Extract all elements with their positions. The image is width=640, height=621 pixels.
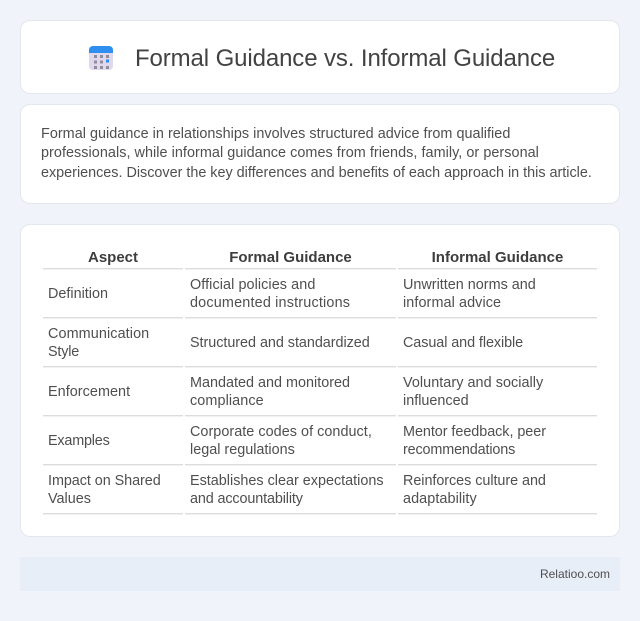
row: Examples: Mentor feedback, peer	[403, 424, 546, 440]
row: Enforcement: compliance	[190, 393, 264, 409]
row: Enforcement: Enforcement	[48, 384, 130, 400]
row: Enforcement: influenced	[403, 393, 469, 409]
row: Enforcement	[48, 375, 544, 409]
row: Examples: Corporate codes of conduct,	[190, 424, 372, 440]
row: Impact on Shared Values: and accountability	[190, 491, 303, 507]
row: Communication Style: Structured and standardized	[190, 335, 370, 351]
row: Communication Style: Communication	[48, 326, 149, 342]
row: Communication Style: Casual and flexible	[403, 335, 523, 351]
row: Examples: Examples	[48, 433, 110, 449]
table header: Formal Guidance: Formal Guidance	[229, 249, 352, 266]
table header: Informal Guidance: Informal Guidance	[432, 249, 563, 266]
row: Enforcement: Voluntary and socially	[403, 375, 543, 391]
row: Impact on Shared Values: adaptability	[403, 491, 477, 507]
row: Examples: recommendations	[403, 442, 515, 458]
row: Examples	[48, 424, 546, 458]
panel: header	[20, 20, 620, 94]
table header: Aspect: Aspect	[88, 249, 138, 266]
row: Definition: Official policies and	[190, 277, 315, 293]
row: Communication Style: Style	[48, 344, 79, 360]
row: Definition	[48, 277, 536, 311]
row: Definition: Definition	[48, 286, 108, 302]
row: Communication Style	[48, 326, 523, 360]
row: Impact on Shared Values: Establishes clear expectations	[190, 473, 384, 489]
text: intro line 1: Formal guidance in relationships involves structured advice from qualified	[41, 126, 510, 142]
row: Definition: documented instructions	[190, 295, 350, 311]
text: footer credit: Relatioo.com	[540, 567, 610, 581]
row: Impact on Shared Values	[48, 473, 546, 507]
row: Enforcement: Mandated and monitored	[190, 375, 350, 391]
panel: introduction	[20, 104, 620, 204]
row: Impact on Shared Values: Impact on Shared	[48, 473, 161, 489]
row: Examples: legal regulations	[190, 442, 295, 458]
panel: comparison table	[20, 224, 620, 537]
row: Definition: Unwritten norms and	[403, 277, 536, 293]
row: Impact on Shared Values: Values	[48, 491, 91, 507]
row: Impact on Shared Values: Reinforces culture and	[403, 473, 546, 489]
text: intro line 2: professionals, while informal guidance comes from friends, family, or personal	[41, 145, 539, 161]
footer	[20, 557, 620, 591]
icon: calendar	[89, 46, 113, 70]
row: Definition: informal advice	[403, 295, 501, 311]
text: intro line 3: experiences. Discover the key differences and benefits of each approach in this article.	[41, 165, 592, 181]
title: Formal Guidance vs. Informal Guidance	[135, 45, 555, 72]
